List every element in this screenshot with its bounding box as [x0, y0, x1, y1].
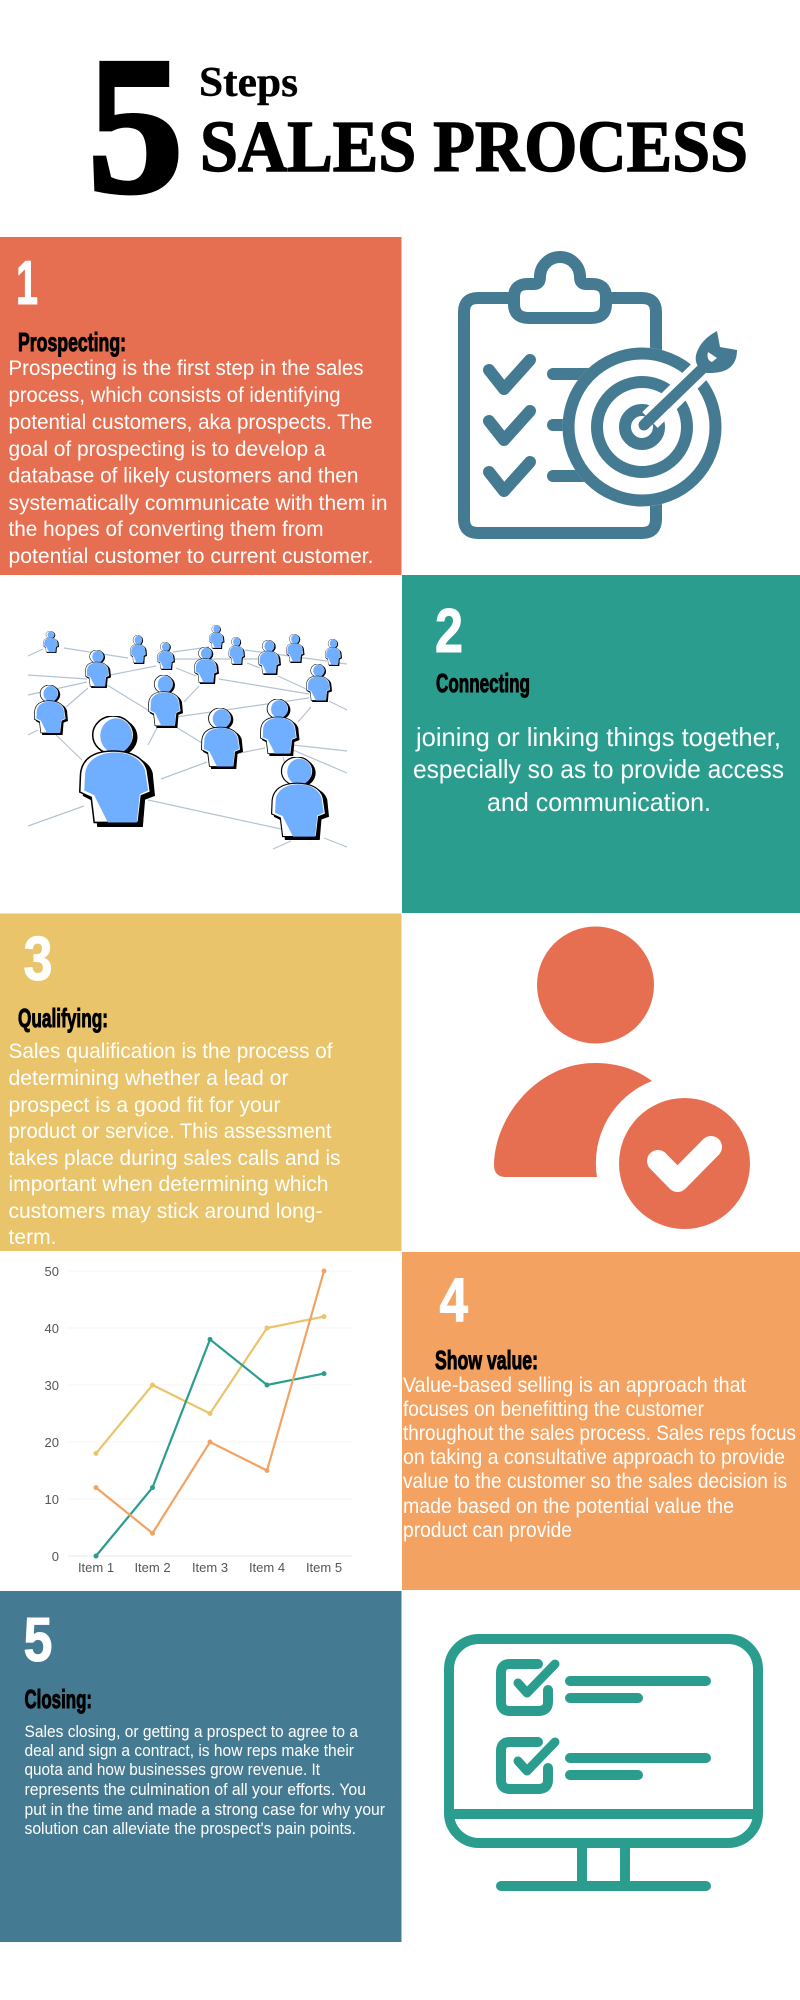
body text: qualifying: term. — [8, 1226, 56, 1249]
x axis labels: Item 4 — [249, 1560, 285, 1575]
y axis labels: 50 — [45, 1264, 59, 1279]
body text: prospecting: database of likely customers and then — [8, 464, 358, 488]
body text: qualifying: Sales qualification is the process of — [8, 1040, 333, 1063]
body text: connecting: and communication. — [487, 787, 711, 817]
heading: Closing: Closing: — [24, 1684, 92, 1714]
heading: Connecting: Connecting — [436, 668, 530, 698]
panel: step 5 closing — [0, 1591, 402, 1942]
body text: qualifying: product or service. This assessment — [8, 1120, 332, 1143]
heading: Prospecting: Prospecting: — [18, 327, 126, 357]
icon: monitor with checklist — [449, 1639, 758, 1886]
series: orange — [94, 1268, 326, 1536]
body text: closing: quota and how businesses grow revenue. It — [24, 1760, 320, 1779]
heading: Sales Process: SALES PROCESS — [200, 106, 748, 187]
body text: show value: made based on the potential value the — [403, 1495, 734, 1518]
y axis labels: 40 — [45, 1321, 59, 1336]
body text: connecting — [413, 722, 784, 817]
body text: qualifying: important when determining which — [8, 1173, 328, 1196]
icon: person with check badge — [494, 926, 750, 1229]
body text: show value — [403, 1374, 796, 1542]
body text: prospecting: the hopes of converting them from — [8, 518, 324, 541]
x axis labels: Item 5 — [306, 1560, 342, 1575]
body text: closing — [24, 1722, 385, 1838]
subtitle: Steps: Steps — [199, 60, 298, 106]
body text: prospecting: goal of prospecting is to develop a — [8, 438, 326, 461]
body text: show value: product can provide — [403, 1519, 572, 1542]
number 1: 1 — [16, 249, 38, 318]
body text: prospecting: process, which consists of identifying — [8, 384, 340, 407]
title — [88, 18, 748, 234]
big numeral 5: 5 — [88, 18, 183, 234]
y axis labels: 0 — [52, 1549, 59, 1564]
body text: closing: represents the culmination of all your efforts. You — [24, 1780, 366, 1799]
x axis labels — [78, 1560, 342, 1575]
body text: prospecting: Prospecting is the first step in the sales — [8, 357, 364, 380]
body text: prospecting: potential customers, aka prospects. The — [8, 411, 372, 434]
series: teal — [94, 1337, 326, 1558]
body text: qualifying: prospect is a good fit for your — [8, 1094, 281, 1117]
x axis labels: Item 2 — [134, 1560, 171, 1575]
y axis labels — [45, 1264, 59, 1564]
number 5: 5 — [24, 1606, 52, 1675]
body text: show value: Value-based selling is an approach that — [403, 1374, 746, 1397]
body text: connecting: joining or linking things together, — [415, 722, 781, 752]
body text: prospecting: potential customer to current customer. — [8, 545, 374, 568]
body text: closing: put in the time and made a strong case for why your — [24, 1800, 385, 1819]
body text: qualifying: customers may stick around long- — [8, 1200, 322, 1223]
panel: step 4 show value — [402, 1252, 800, 1590]
illustration: connected people network — [28, 625, 347, 849]
icon: clipboard with target — [464, 257, 737, 533]
body text: prospecting: systematically communicate with them in — [8, 492, 388, 515]
y axis labels: 20 — [45, 1435, 59, 1450]
panel: step 1 prospecting — [0, 237, 402, 575]
body text: closing: Sales closing, or getting a prospect to agree to a — [24, 1722, 358, 1741]
x axis labels: Item 3 — [192, 1560, 228, 1575]
body text: qualifying: takes place during sales calls and is — [8, 1147, 340, 1170]
x axis labels: Item 1 — [78, 1560, 114, 1575]
panel: step 2 connecting — [402, 575, 800, 913]
body text: connecting: especially so as to provide access — [413, 754, 784, 784]
body text: closing: deal and sign a contract, is how reps make their — [24, 1741, 354, 1760]
panel: step 3 qualifying — [0, 914, 402, 1251]
y axis labels: 10 — [45, 1492, 59, 1507]
body text: prospecting — [8, 357, 388, 568]
heading: Qualifying: Qualifying: — [18, 1003, 108, 1033]
line chart — [45, 1264, 352, 1575]
body text: qualifying: determining whether a lead or — [8, 1067, 288, 1090]
heading: Show value: Show value: — [435, 1345, 538, 1375]
body text: qualifying — [8, 1040, 340, 1249]
number 4: 4 — [440, 1266, 468, 1335]
body text: show value: focuses on benefitting the customer — [403, 1398, 704, 1421]
body text: closing: solution can alleviate the prospect's pain points. — [24, 1819, 356, 1838]
y axis labels: 30 — [45, 1378, 59, 1393]
number 3: 3 — [24, 925, 52, 994]
number 2: 2 — [435, 597, 463, 666]
series: yellow — [94, 1314, 326, 1456]
